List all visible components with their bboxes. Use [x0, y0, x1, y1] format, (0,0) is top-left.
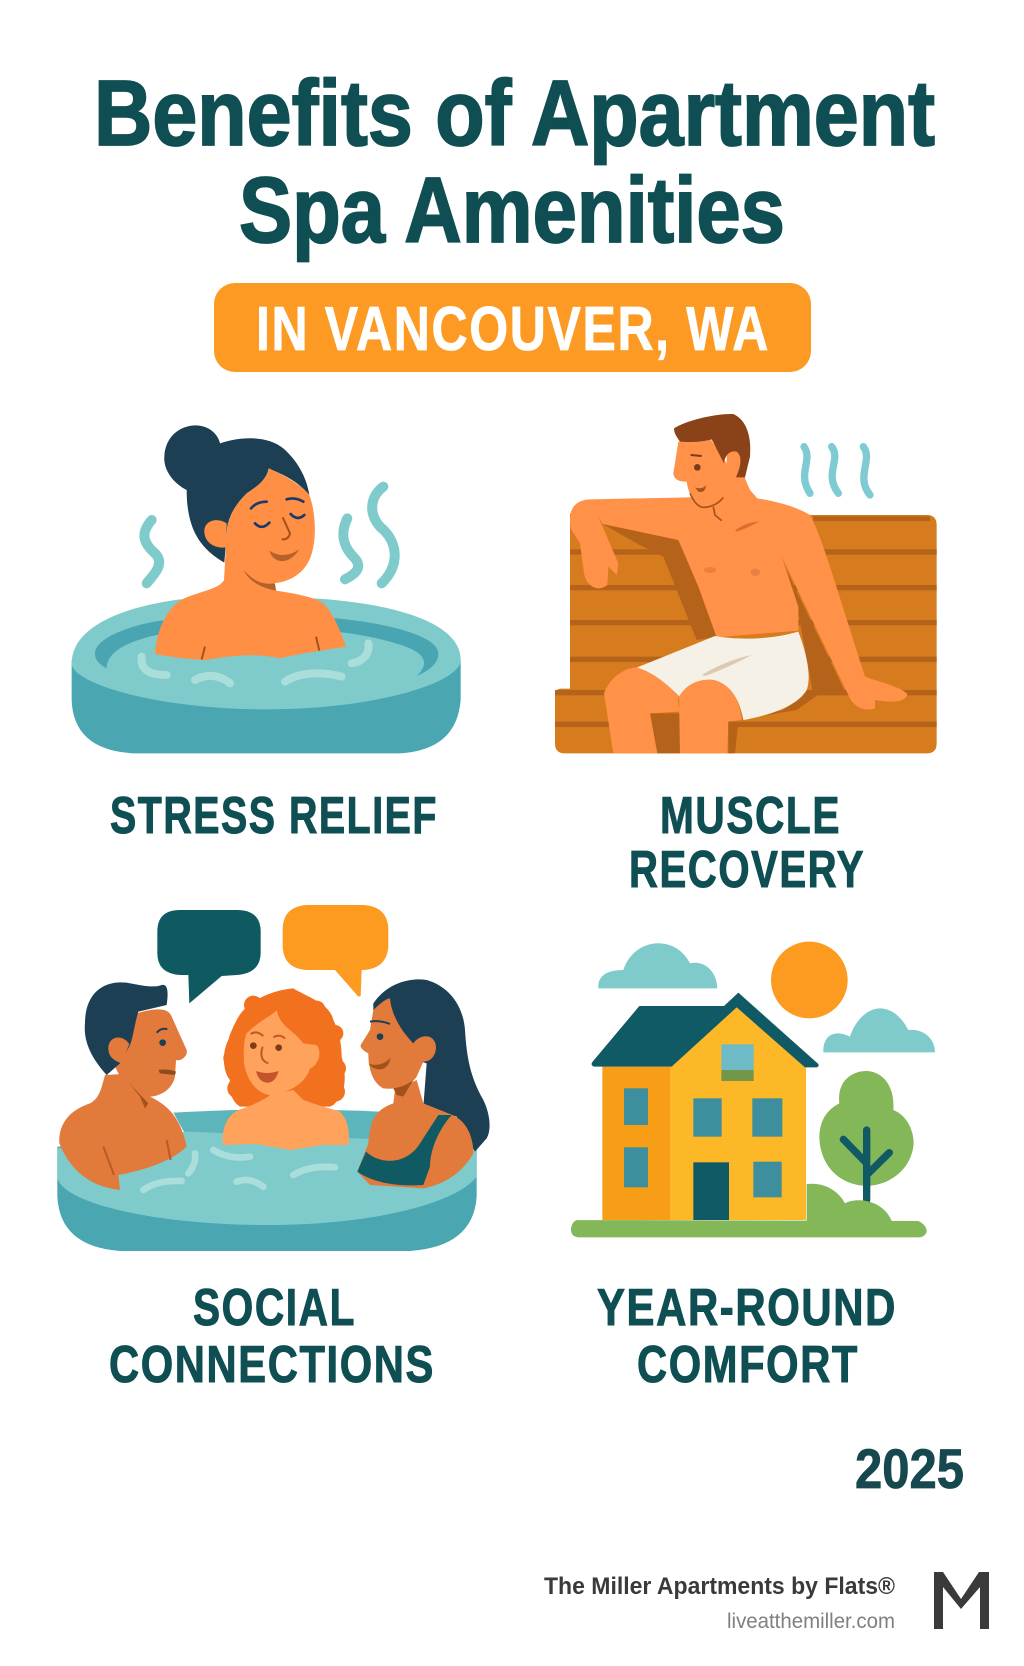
label: muscle recovery: RECOVERY [629, 841, 865, 899]
location badge: IN VANCOUVER, WA [256, 295, 770, 364]
title [94, 61, 935, 262]
label: muscle recovery [629, 787, 865, 899]
year: 2025 [855, 1437, 964, 1500]
icon: three people talking in hot tub [57, 905, 490, 1251]
icon: house with sun, clouds and tree [571, 942, 935, 1237]
label: year-round comfort: COMFORT [637, 1336, 859, 1394]
footer: website: liveatthemiller.com [727, 1610, 895, 1633]
panel: stress relief [72, 425, 461, 845]
label: muscle recovery: MUSCLE [660, 787, 841, 845]
label: year-round comfort [597, 1279, 897, 1394]
label: stress relief: STRESS RELIEF [110, 787, 438, 845]
title: Spa Amenities [239, 158, 785, 262]
label: social connections [109, 1279, 435, 1394]
footer: brand name: The Miller Apartments by Flats® [544, 1573, 895, 1600]
label: year-round comfort: YEAR-ROUND [597, 1279, 897, 1337]
label: social connections: CONNECTIONS [109, 1336, 435, 1394]
panel: social connections [57, 905, 490, 1394]
panel: muscle recovery [555, 414, 937, 899]
logo: M [934, 1572, 989, 1629]
icon: woman relaxing in hot tub [72, 425, 461, 753]
icon: man on sauna bench [555, 414, 937, 753]
panel: year-round comfort [571, 942, 935, 1394]
location badge [214, 283, 811, 372]
label: social connections: SOCIAL [193, 1279, 356, 1337]
